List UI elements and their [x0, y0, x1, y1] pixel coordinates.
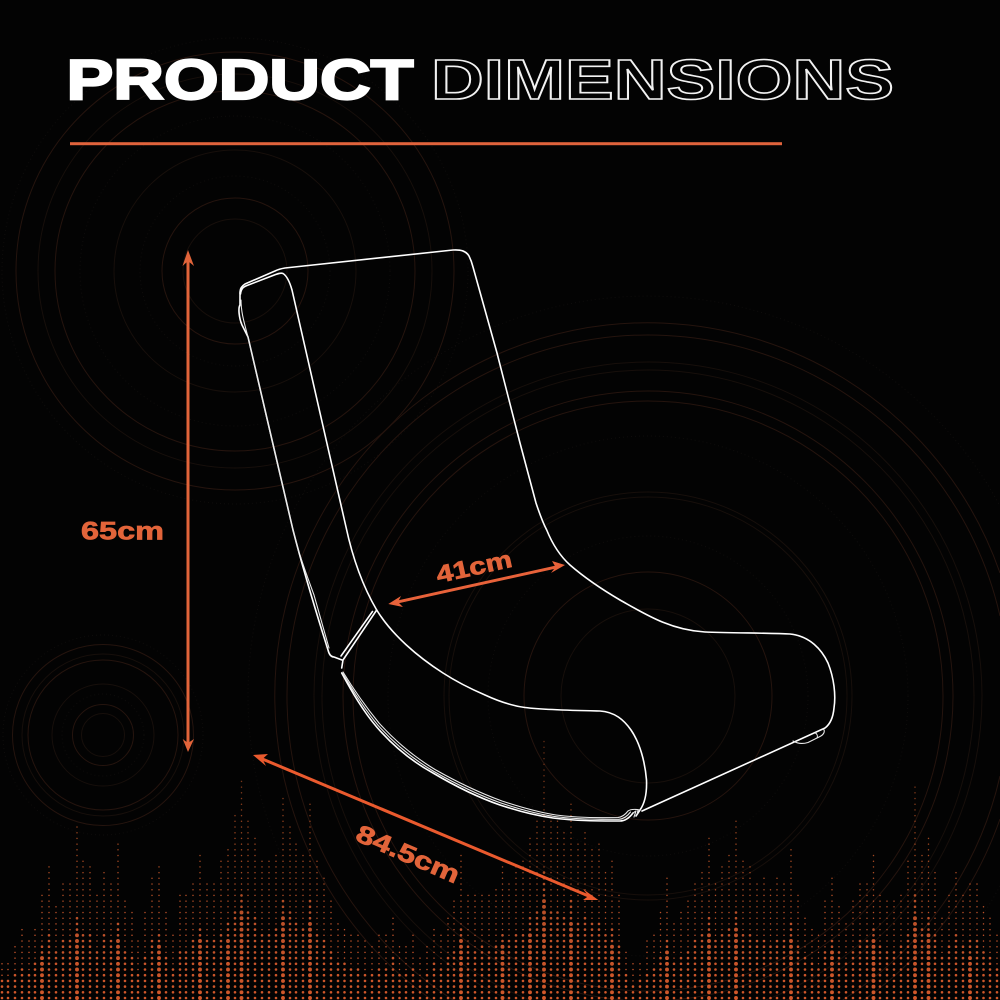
chair: main silhouette — [240, 250, 835, 811]
label: 41cm: 41cm — [434, 546, 515, 589]
length arrow — [253, 754, 598, 900]
title — [66, 48, 894, 112]
width arrow — [388, 561, 565, 607]
chair: rear foot detail — [633, 810, 638, 817]
concentric rings: lower left — [3, 635, 203, 835]
label: 84.5cm: 84.5cm — [352, 820, 464, 889]
chair: rocker base lines — [342, 673, 633, 821]
chair: front foot — [793, 729, 824, 743]
chair: rear edge second line — [241, 300, 329, 648]
title word: DIMENSIONS: DIMENSIONS — [431, 48, 894, 112]
title word: PRODUCT: PRODUCT — [66, 48, 414, 112]
concentric rings: large right — [248, 296, 1000, 1000]
title underline — [70, 142, 782, 145]
halftone equaliser dots — [2, 740, 997, 998]
chair outline drawing — [239, 250, 835, 821]
chair: inner panel and seat edge — [240, 273, 647, 816]
chair: fold connector — [341, 610, 377, 668]
chair: rear edge — [239, 293, 342, 660]
concentric rings: top left — [2, 38, 468, 504]
height arrow — [182, 250, 194, 752]
label: 65cm: 65cm — [81, 518, 164, 546]
